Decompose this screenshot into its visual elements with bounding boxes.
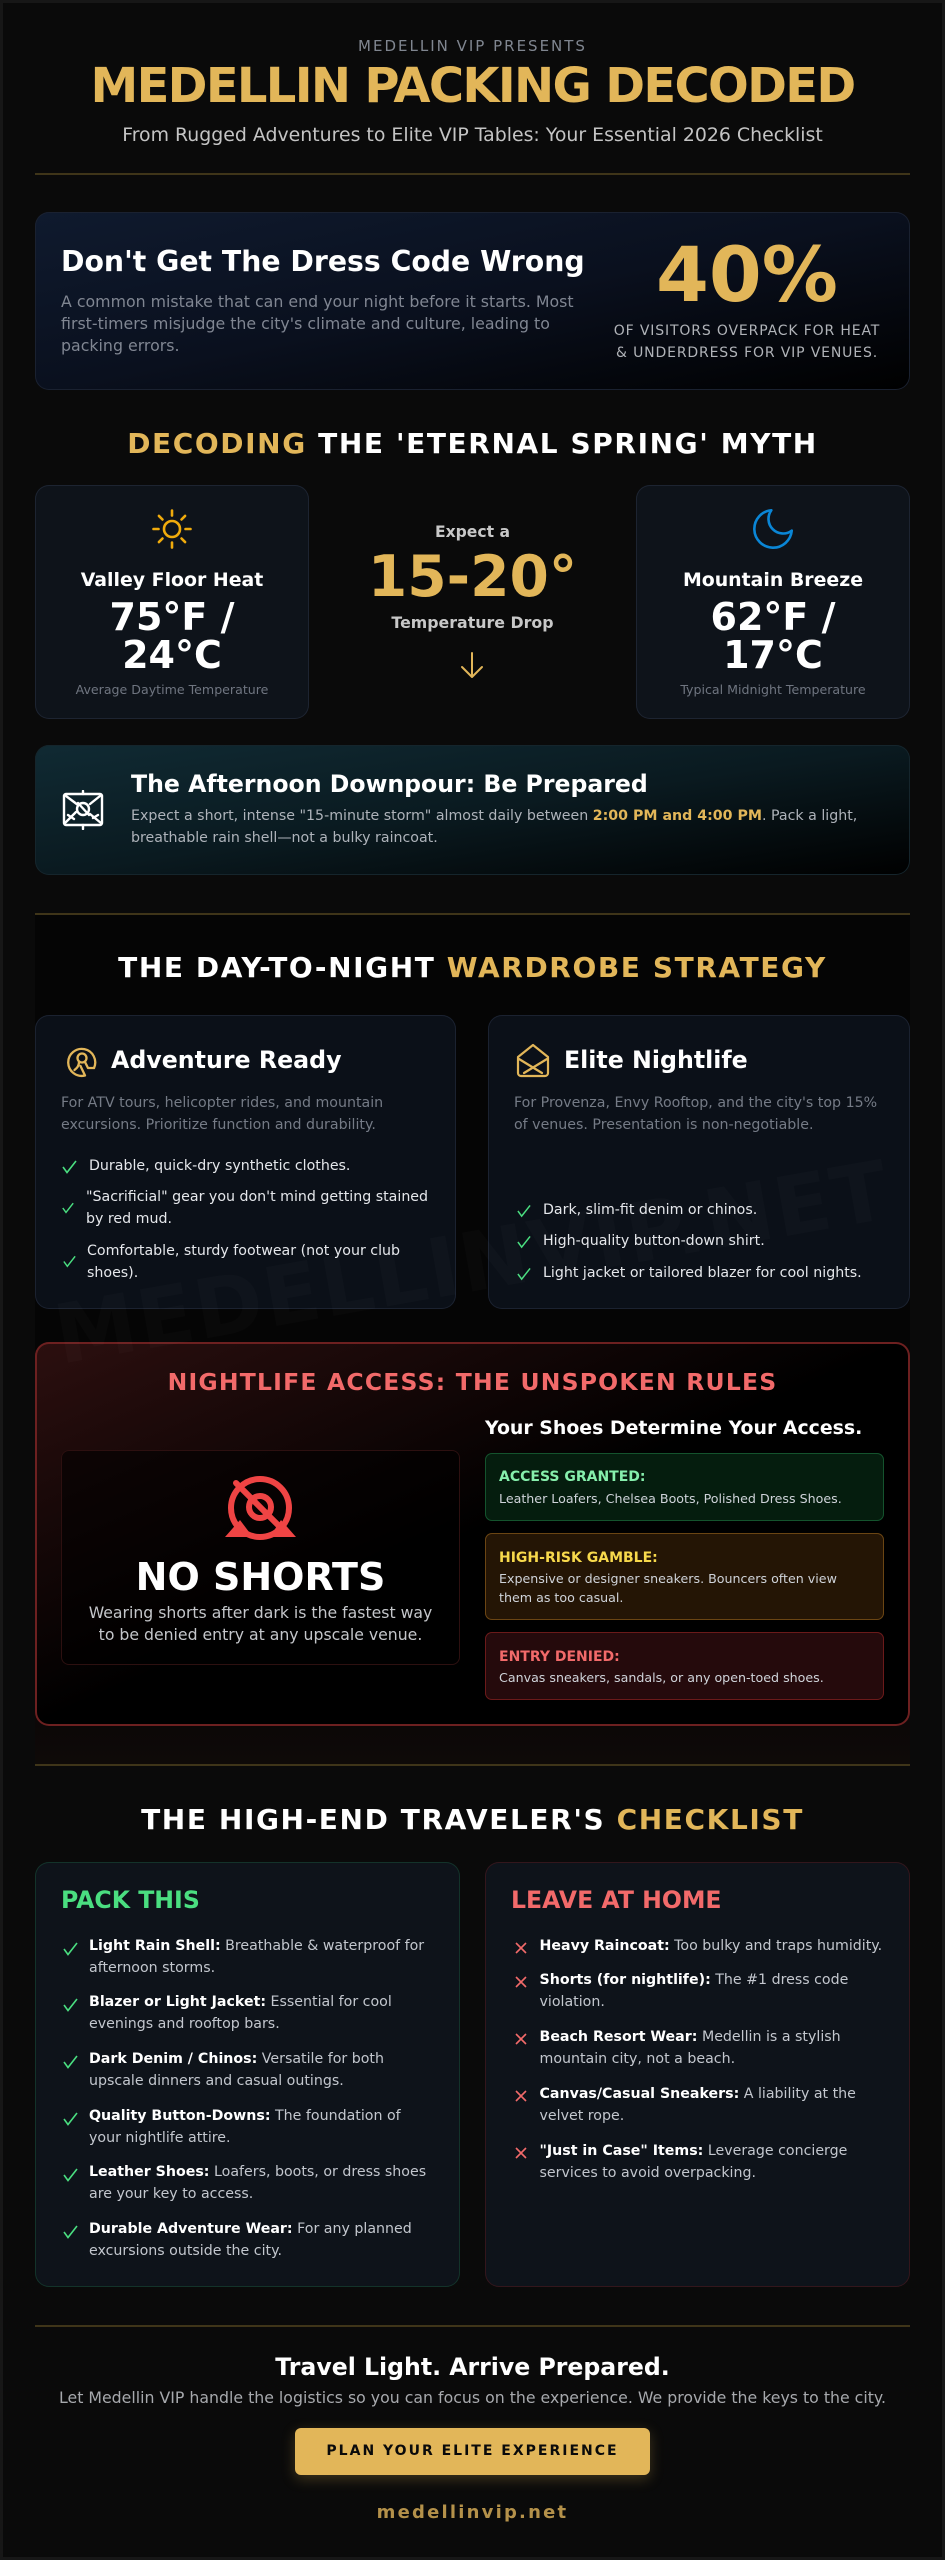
list item: Quality Button-Downs: The foundation of (89, 2108, 401, 2124)
caption: Typical Midnight Temperature (680, 682, 866, 697)
button (295, 2428, 650, 2475)
no shorts text: Wearing shorts after dark is the fastest way (89, 1603, 432, 1622)
list item: "Just in Case" Items: Leverage concierge (540, 2143, 847, 2159)
header (91, 37, 854, 146)
list item (63, 2051, 384, 2089)
panel: elite nightlife (488, 1015, 910, 1309)
body text: breathable rain shell—not a bulky raincoat. (131, 830, 438, 846)
status text: them as too casual. (499, 1590, 623, 1605)
list item (63, 1938, 424, 1976)
list item: evenings and rooftop bars. (89, 2016, 280, 2032)
list item: services to avoid overpacking. (540, 2165, 756, 2181)
panel: nightlife access (35, 1342, 910, 1726)
list item (516, 2086, 856, 2124)
temperature: 75°F / (110, 595, 234, 639)
panel: dress code stat (35, 212, 910, 390)
status: entry denied (485, 1632, 884, 1700)
list item: are your key to access. (89, 2186, 253, 2202)
status text: Canvas sneakers, sandals, or any open-toed shoes. (499, 1670, 824, 1685)
card title: Elite Nightlife (564, 1046, 748, 1074)
closing heading: Travel Light. Arrive Prepared. (275, 2353, 670, 2381)
status text (499, 1571, 837, 1605)
body text (131, 808, 857, 846)
stat caption (614, 323, 880, 361)
description: of venues. Presentation is non-negotiable. (514, 1117, 813, 1133)
list item (516, 2143, 847, 2181)
list item (63, 1243, 400, 1281)
panel: valley floor heat (35, 485, 309, 719)
body text: packing errors. (61, 336, 179, 355)
section: wardrobe strategy background (35, 914, 910, 1765)
icon: sun (152, 509, 192, 549)
list item (516, 1972, 848, 2010)
description (61, 1095, 383, 1133)
panel: no shorts (61, 1450, 460, 1665)
list item (62, 1189, 428, 1227)
closing text: Let Medellin VIP handle the logistics so you can focus on the experience. We provide the keys to the city. (59, 2388, 886, 2407)
drop label: Temperature Drop (391, 613, 554, 632)
list item (63, 2164, 426, 2202)
caption: Average Daytime Temperature (76, 682, 268, 697)
card title: Valley Floor Heat (81, 569, 263, 591)
list item: your nightlife attire. (89, 2130, 231, 2146)
heading: wardrobe strategy: THE DAY-TO-NIGHT WARDROBE STRATEGY (118, 951, 827, 984)
stat caption: OF VISITORS OVERPACK FOR HEAT (614, 323, 880, 339)
list item (63, 1994, 392, 2032)
temperature: 24°C (122, 633, 222, 677)
heading: checklist: THE HIGH-END TRAVELER'S CHECKLIST (141, 1803, 804, 1836)
list item: by red mud. (86, 1211, 172, 1227)
list item: High-quality button-down shirt. (543, 1233, 765, 1249)
list item: "Sacrificial" gear you don't mind getting stained (86, 1189, 428, 1205)
drop value: 15-20° (368, 544, 577, 610)
panel heading: PACK THIS (61, 1886, 200, 1914)
shoes heading: Your Shoes Determine Your Access. (485, 1417, 862, 1439)
list item: Dark, slim-fit denim or chinos. (543, 1202, 757, 1218)
list item: Heavy Raincoat: Too bulky and traps humidity. (540, 1938, 882, 1954)
body text: A common mistake that can end your night before it starts. Most (61, 292, 574, 311)
status label: ACCESS GRANTED: (499, 1469, 646, 1485)
card title: Mountain Breeze (683, 569, 863, 591)
icon: open envelope (516, 1044, 550, 1078)
list item: upscale dinners and casual outings. (89, 2073, 344, 2089)
list item: Durable Adventure Wear: For any planned (89, 2221, 412, 2237)
no shorts text (89, 1603, 432, 1644)
list item (63, 2221, 412, 2259)
icon: rain storm (62, 790, 104, 830)
description: excursions. Prioritize function and durability. (61, 1117, 376, 1133)
heading: eternal spring: DECODING THE 'ETERNAL SPRING' MYTH (127, 427, 818, 460)
description: For Provenza, Envy Rooftop, and the city's top 15% (514, 1095, 877, 1111)
panel: mountain breeze (636, 485, 910, 719)
list item: mountain city, not a beach. (540, 2051, 735, 2067)
expect a: Expect a (435, 523, 510, 541)
list item (63, 2108, 401, 2146)
panel: adventure ready (35, 1015, 456, 1309)
icon: adventure (67, 1048, 96, 1078)
list item: afternoon storms. (89, 1960, 215, 1976)
eyebrow: MEDELLIN VIP PRESENTS (358, 37, 587, 55)
heading: The Afternoon Downpour: Be Prepared (131, 770, 648, 798)
list item: Canvas/Casual Sneakers: A liability at the (540, 2086, 856, 2102)
list item: Dark Denim / Chinos: Versatile for both (89, 2051, 384, 2067)
list item: velvet rope. (540, 2108, 624, 2124)
list item: Light Rain Shell: Breathable & waterproof for (89, 1938, 424, 1954)
list item: Durable, quick-dry synthetic clothes. (89, 1158, 350, 1174)
status label: ENTRY DENIED: (499, 1649, 620, 1665)
icon: no shorts (225, 1476, 296, 1540)
panel heading: LEAVE AT HOME (511, 1886, 722, 1914)
subtitle: From Rugged Adventures to Elite VIP Tables: Your Essential 2026 Checklist (122, 124, 823, 146)
body text (61, 292, 574, 355)
list item: Comfortable, sturdy footwear (not your club (87, 1243, 400, 1259)
list item: Beach Resort Wear: Medellin is a stylish (540, 2029, 841, 2045)
title: MEDELLIN PACKING DECODED (91, 58, 854, 114)
icon: moon (753, 509, 793, 549)
list item: Leather Shoes: Loafers, boots, or dress shoes (89, 2164, 426, 2180)
panel: pack this (35, 1862, 460, 2287)
temperature: 62°F / (711, 595, 835, 639)
list item (516, 2029, 841, 2067)
watermark: MEDELLINVIP.NET (48, 1143, 897, 1384)
no shorts heading: NO SHORTS (136, 1555, 385, 1599)
list item: Blazer or Light Jacket: Essential for cool (89, 1994, 392, 2010)
status: access granted (485, 1453, 884, 1521)
panel: leave at home (485, 1862, 910, 2287)
status: high-risk gamble (485, 1533, 884, 1620)
stat: 40 percent: 40% (656, 230, 838, 319)
arrow: down (461, 652, 483, 678)
list item: Shorts (for nightlife): The #1 dress code (540, 1972, 848, 1988)
temperature: 17°C (723, 633, 823, 677)
website: medellinvip.net (377, 2502, 568, 2523)
heading: Don't Get The Dress Code Wrong (61, 245, 585, 278)
temperature (110, 595, 234, 677)
list item: excursions outside the city. (89, 2243, 282, 2259)
footer (59, 2353, 886, 2523)
card title: Adventure Ready (111, 1046, 342, 1074)
body text: Expect a short, intense "15-minute storm" almost daily between 2:00 PM and 4:00 PM. Pack a light, (131, 808, 857, 824)
stat caption: & UNDERDRESS FOR VIP VENUES. (616, 345, 878, 361)
description: For ATV tours, helicopter rides, and mountain (61, 1095, 383, 1111)
no shorts text: to be denied entry at any upscale venue. (99, 1625, 422, 1644)
description (514, 1095, 877, 1133)
temperature drop callout (368, 523, 577, 678)
status text: Leather Loafers, Chelsea Boots, Polished Dress Shoes. (499, 1491, 842, 1506)
button: PLAN YOUR ELITE EXPERIENCE (326, 2443, 619, 2459)
body text: first-timers misjudge the city's climate and culture, leading to (61, 314, 550, 333)
status text: Expensive or designer sneakers. Bouncers often view (499, 1571, 837, 1586)
list item: shoes). (87, 1265, 138, 1281)
temperature (711, 595, 836, 677)
list item: Light jacket or tailored blazer for cool nights. (543, 1265, 862, 1281)
list item: violation. (540, 1994, 605, 2010)
status label: HIGH-RISK GAMBLE: (499, 1550, 658, 1566)
panel: afternoon downpour (35, 745, 910, 875)
heading: NIGHTLIFE ACCESS: THE UNSPOKEN RULES (168, 1368, 777, 1396)
